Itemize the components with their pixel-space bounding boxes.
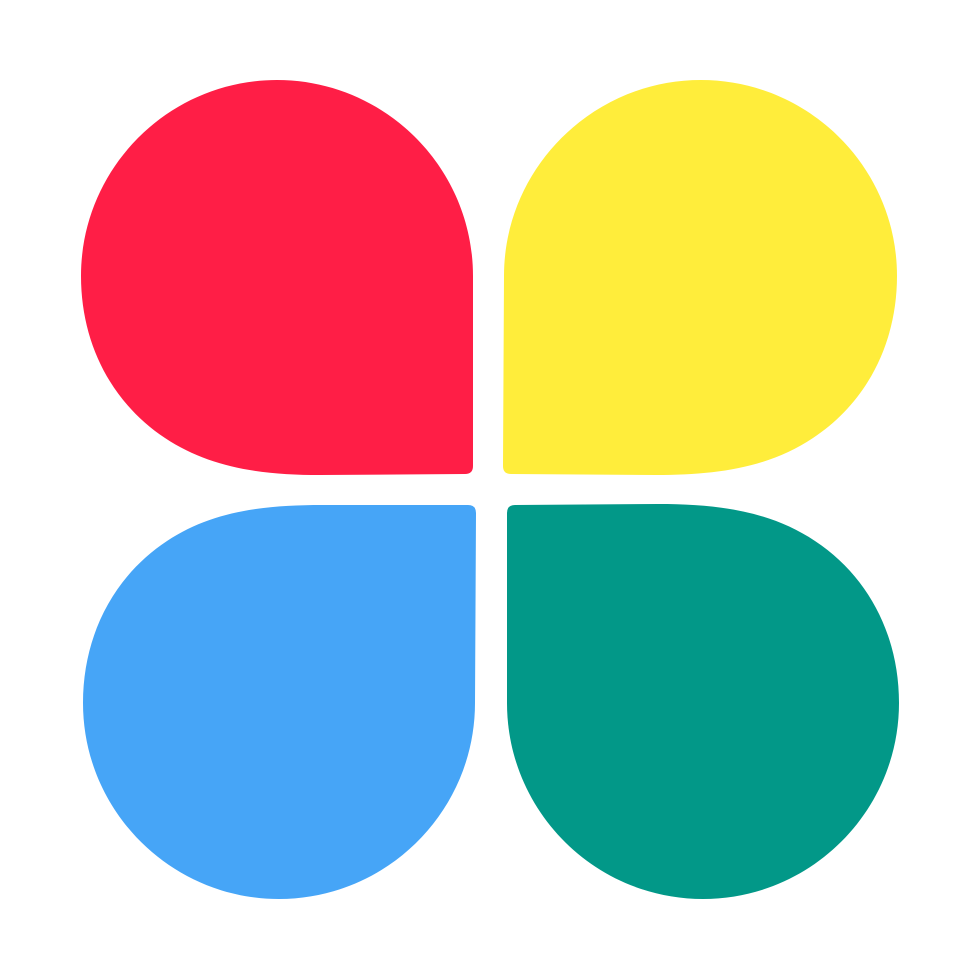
petal: blue, bottom left <box>83 505 476 899</box>
petal: red, top left <box>81 80 473 475</box>
petal: green, bottom right <box>507 504 899 899</box>
petal: yellow, top right <box>503 80 897 475</box>
